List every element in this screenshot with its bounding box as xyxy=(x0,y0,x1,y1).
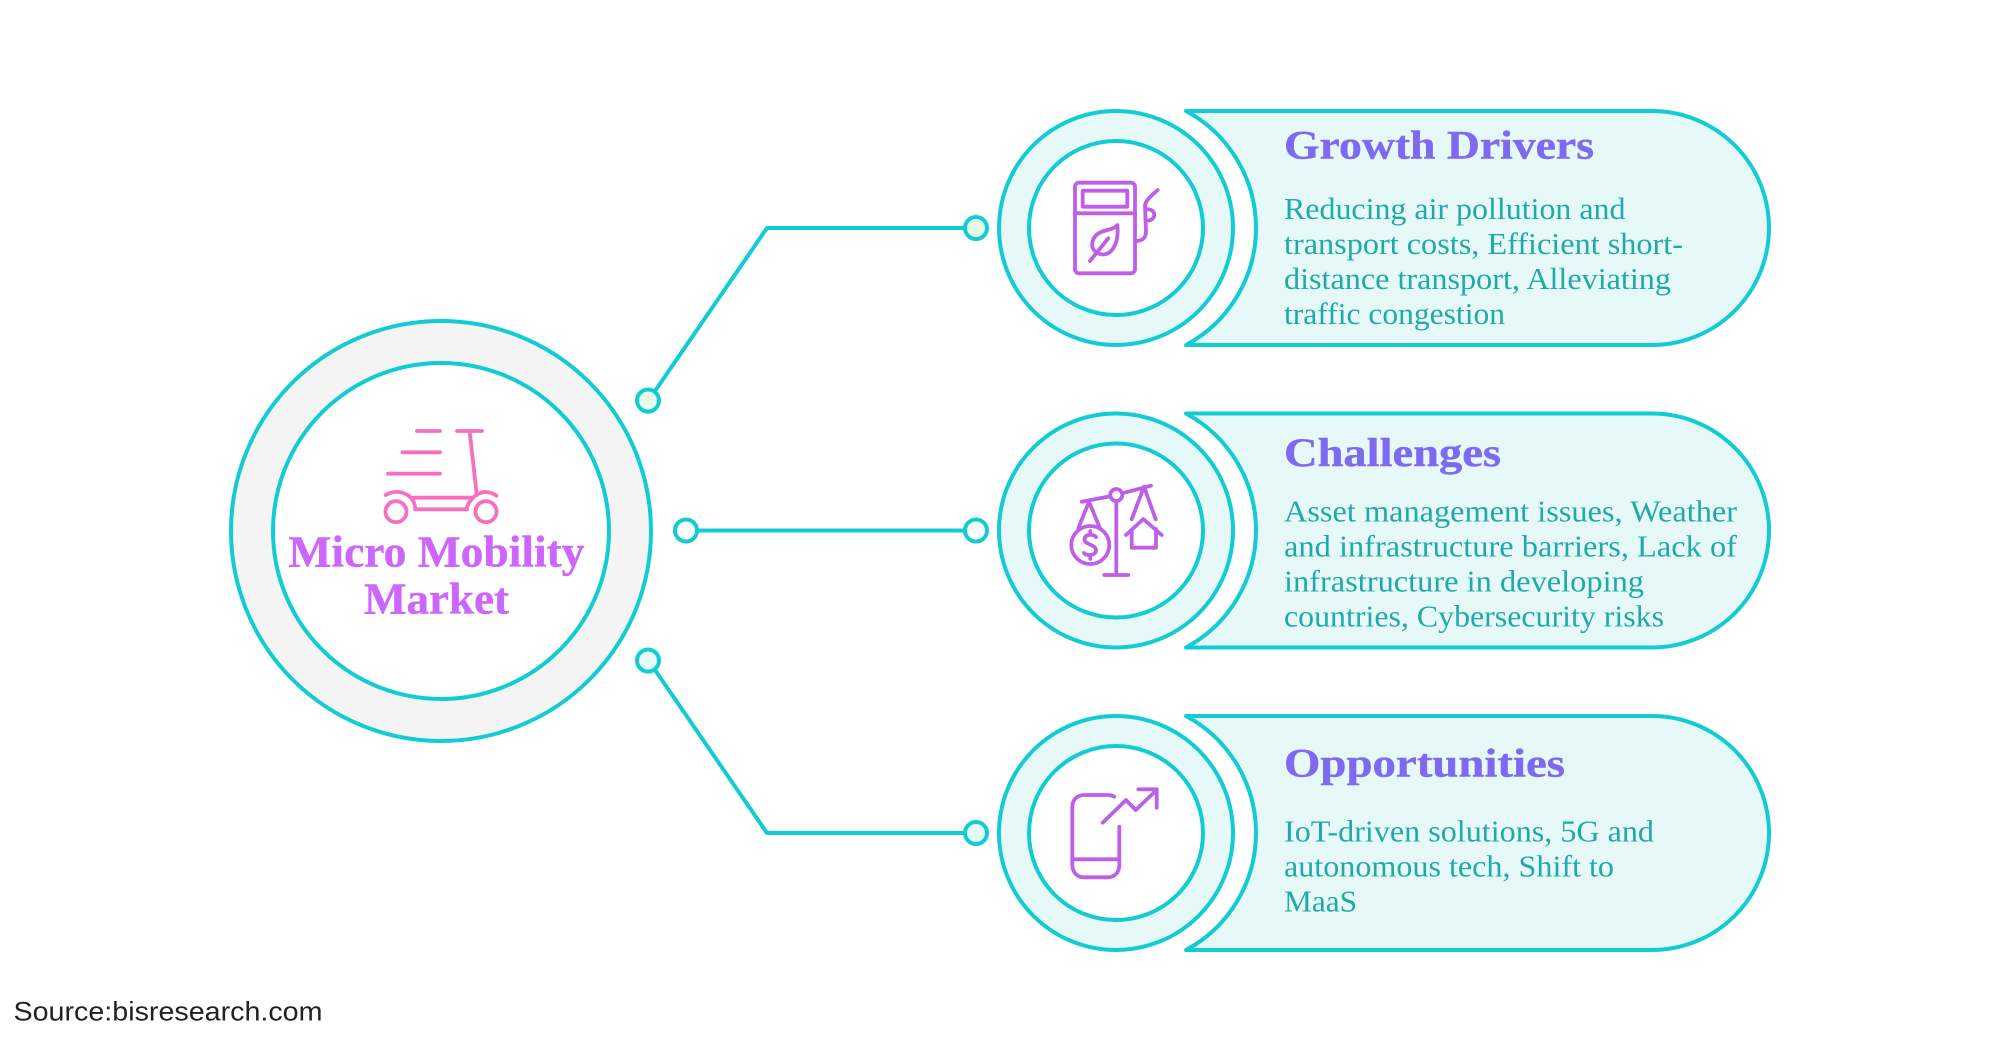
text: challenges description: Asset management issues, Weather xyxy=(1284,494,1738,529)
text: growth drivers description: traffic congestion xyxy=(1284,296,1506,331)
text: opportunities description xyxy=(1284,814,1655,919)
connector: hub to opportunities xyxy=(637,650,987,844)
text: opportunities description: MaaS xyxy=(1284,884,1357,919)
icon: phone with rising arrow xyxy=(1072,789,1157,877)
text: growth drivers description xyxy=(1284,191,1683,331)
text: growth drivers description: transport costs, Efficient short- xyxy=(1284,226,1683,261)
source note: Source:bisresearch.com xyxy=(14,996,322,1026)
connector: hub to challenges xyxy=(675,520,987,542)
text: opportunities description: autonomous tech, Shift to xyxy=(1284,849,1614,884)
text: challenges description: infrastructure in developing xyxy=(1284,564,1644,599)
text: challenges description xyxy=(1284,494,1738,634)
text: challenges description: countries, Cybersecurity risks xyxy=(1284,599,1664,634)
heading: challenges: Challenges xyxy=(1284,430,1501,475)
heading: growth drivers: Growth Drivers xyxy=(1284,122,1594,168)
icon: scooter xyxy=(386,431,496,522)
text: opportunities description: IoT-driven solutions, 5G and xyxy=(1284,814,1655,849)
icon: fuel pump with leaf xyxy=(1075,183,1158,273)
title: Micro Mobility Market: Micro Mobility xyxy=(288,528,584,576)
connector: hub to growth drivers xyxy=(637,217,987,412)
text: growth drivers description: distance transport, Alleviating xyxy=(1284,261,1671,296)
heading: opportunities: Opportunities xyxy=(1284,740,1565,786)
title: Micro Mobility Market xyxy=(288,528,584,624)
panel: growth drivers xyxy=(999,111,1769,345)
icon: balance scale with coin and house xyxy=(1071,486,1162,575)
title: Micro Mobility Market: Market xyxy=(364,574,509,624)
panel: central hub xyxy=(231,321,651,741)
panel: challenges xyxy=(999,414,1769,648)
panel: opportunities xyxy=(999,716,1769,950)
text: challenges description: and infrastructure barriers, Lack of xyxy=(1284,529,1738,564)
text: growth drivers description: Reducing air pollution and xyxy=(1284,191,1626,226)
